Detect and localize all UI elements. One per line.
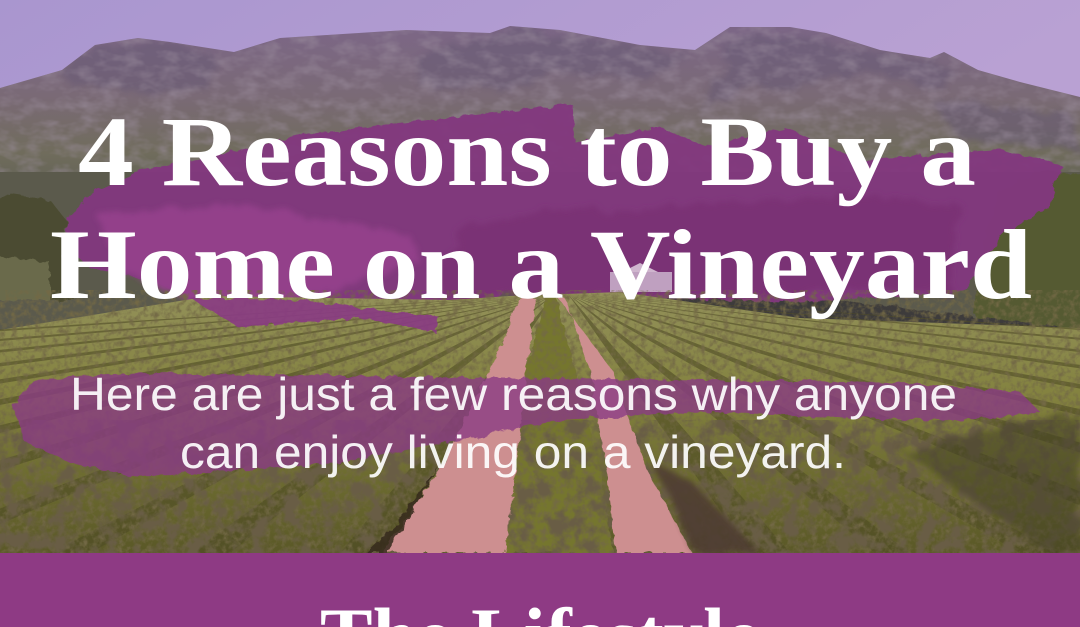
title: 4 Reasons to Buy a	[78, 96, 976, 207]
foreground bushes	[0, 420, 1080, 553]
trees in brush	[430, 195, 960, 300]
near shadow left	[365, 465, 440, 553]
vine row gaps left	[0, 294, 555, 553]
pink soil paths	[382, 298, 692, 553]
dark forest band	[0, 172, 1080, 350]
farmhouse	[610, 263, 672, 292]
brush stroke behind title	[65, 104, 1062, 328]
brush stroke behind subtitle	[12, 373, 1040, 476]
title	[50, 96, 1032, 320]
subtitle: can enjoy living on a vineyard.	[180, 426, 846, 478]
title: Home on a Vineyard	[50, 209, 1032, 320]
valley field in brush	[95, 207, 420, 310]
lower brush fragment in field	[190, 298, 440, 332]
center vine row	[503, 296, 613, 553]
mountain	[0, 26, 1080, 172]
cliff faces	[62, 30, 1080, 150]
near shadow right	[650, 460, 760, 553]
subtitle	[70, 368, 957, 478]
sky	[0, 0, 1080, 130]
purple section band	[0, 553, 1080, 627]
dark corner shade right	[900, 410, 1080, 553]
vine row gaps right	[568, 294, 1080, 553]
vineyard field	[0, 290, 1080, 553]
tree lines	[0, 170, 1080, 330]
foliage texture	[0, 290, 1080, 553]
subtitle: Here are just a few reasons why anyone	[70, 368, 957, 420]
